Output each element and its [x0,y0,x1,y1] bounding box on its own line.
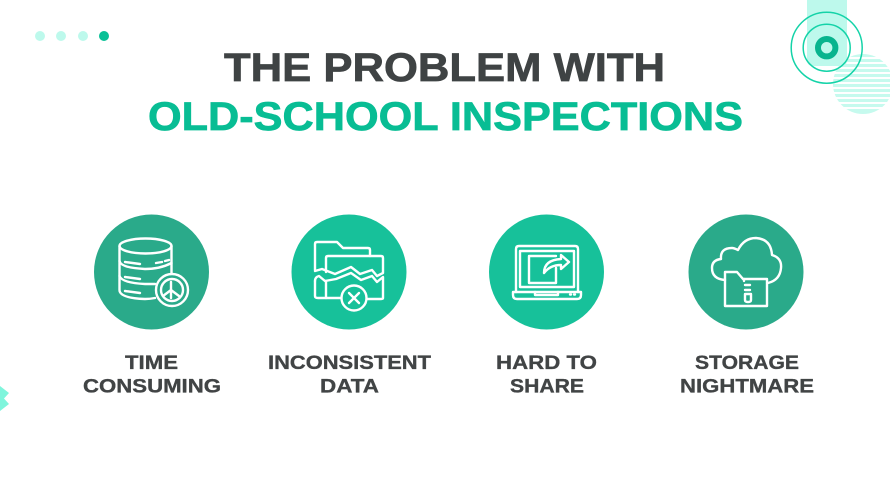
decorative dots, top left [35,31,109,41]
label: storage nightmare: STORAGE [695,352,799,374]
title: THE PROBLEM WITH [224,46,665,90]
item: time consuming [83,214,221,398]
decorative target graphic, top right [791,0,890,114]
icon: torn folder with x [292,214,406,330]
item: inconsistent data [268,214,431,398]
icon: laptop with share arrow [489,214,604,330]
title [148,46,743,139]
label: hard to share: SHARE [510,376,584,398]
item: hard to share [489,214,604,398]
label: hard to share [496,352,597,398]
item: storage nightmare [680,214,814,398]
icon: database with clock [94,214,209,330]
title: OLD-SCHOOL INSPECTIONS [148,95,743,139]
icon: cloud with zipped folder [688,214,804,330]
label: time consuming: TIME [125,352,178,374]
label: inconsistent data [268,352,431,398]
label: inconsistent data: INCONSISTENT [268,352,431,374]
label: storage nightmare: NIGHTMARE [680,376,814,398]
label: time consuming [83,352,221,398]
label: hard to share: HARD TO [496,352,597,374]
label: inconsistent data: DATA [320,376,379,398]
decorative shape, left edge [0,386,9,411]
label: storage nightmare [680,352,814,398]
label: time consuming: CONSUMING [83,376,221,398]
